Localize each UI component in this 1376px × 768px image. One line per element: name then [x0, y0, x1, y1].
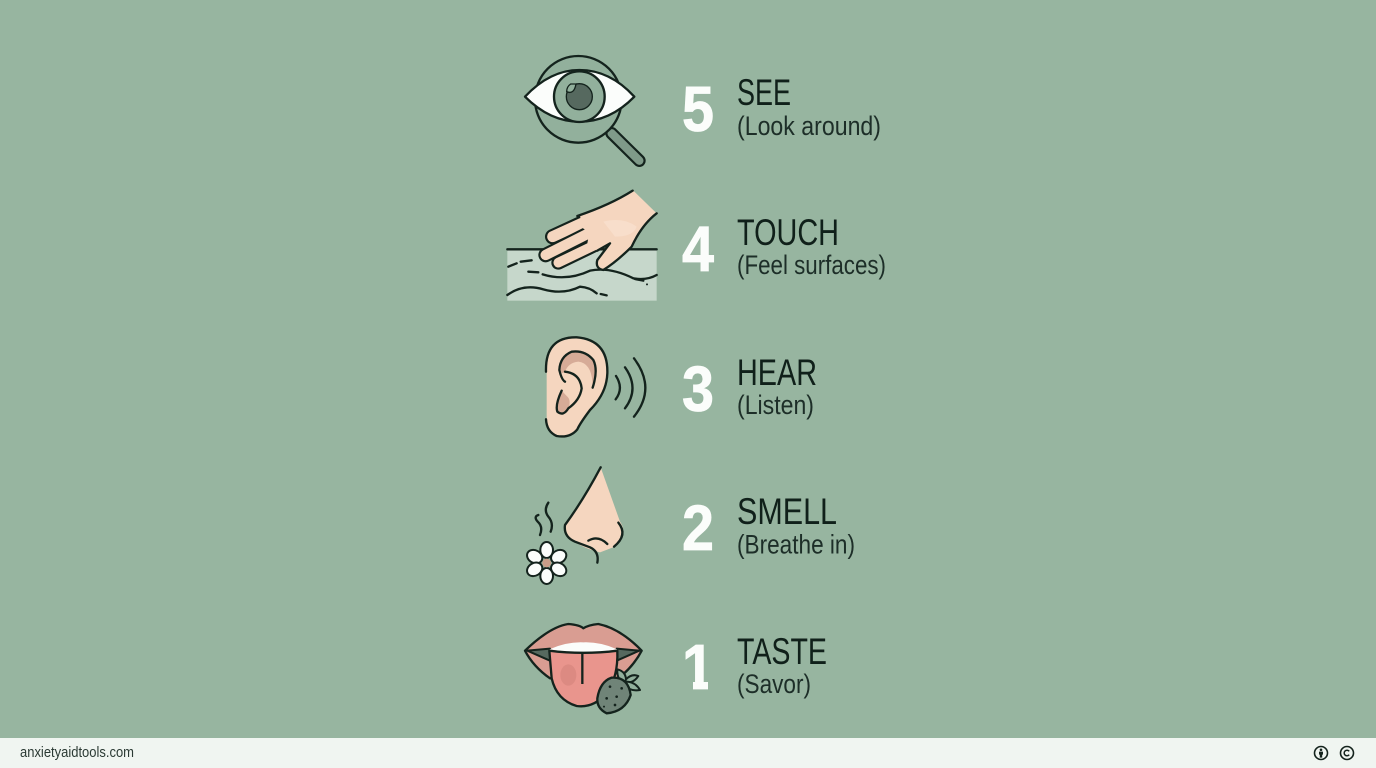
number 1: 1 [682, 631, 714, 703]
label: smell: SMELL [737, 491, 837, 532]
sublabel: listen: (Listen) [737, 390, 814, 420]
row: taste [525, 624, 827, 713]
strawberry [617, 669, 626, 682]
row: hear [546, 337, 817, 436]
icon: copyright [1340, 746, 1354, 760]
footer url: anxietyaidtools.com [20, 745, 134, 761]
footer bar [0, 738, 1376, 768]
flower [525, 542, 569, 584]
label: see: SEE [737, 72, 791, 113]
sublabel: breathe in: (Breathe in) [737, 530, 855, 560]
icon: attribution [1314, 746, 1328, 760]
palm [580, 191, 657, 270]
sublabel: look around: (Look around) [737, 111, 881, 141]
icon: eye with magnifying glass [525, 56, 639, 161]
number 3: 3 [682, 353, 714, 425]
fingers [553, 223, 582, 237]
row: smell [525, 467, 855, 584]
sublabel: feel surfaces: (Feel surfaces) [737, 250, 886, 280]
row: see [525, 56, 881, 161]
label: hear: HEAR [737, 352, 817, 393]
label: taste: TASTE [737, 631, 827, 672]
number 4: 4 [682, 213, 714, 285]
icon: ear with sound waves [546, 337, 645, 436]
sublabel: savor: (Savor) [737, 669, 811, 699]
number 5: 5 [682, 73, 714, 145]
label: touch: TOUCH [737, 212, 839, 253]
row: touch [507, 191, 886, 301]
number 2: 2 [682, 492, 714, 564]
icon: nose with flower and scent [525, 467, 623, 584]
icon: hand on textured surface [507, 191, 657, 301]
icon: mouth with tongue and strawberry [525, 624, 642, 713]
